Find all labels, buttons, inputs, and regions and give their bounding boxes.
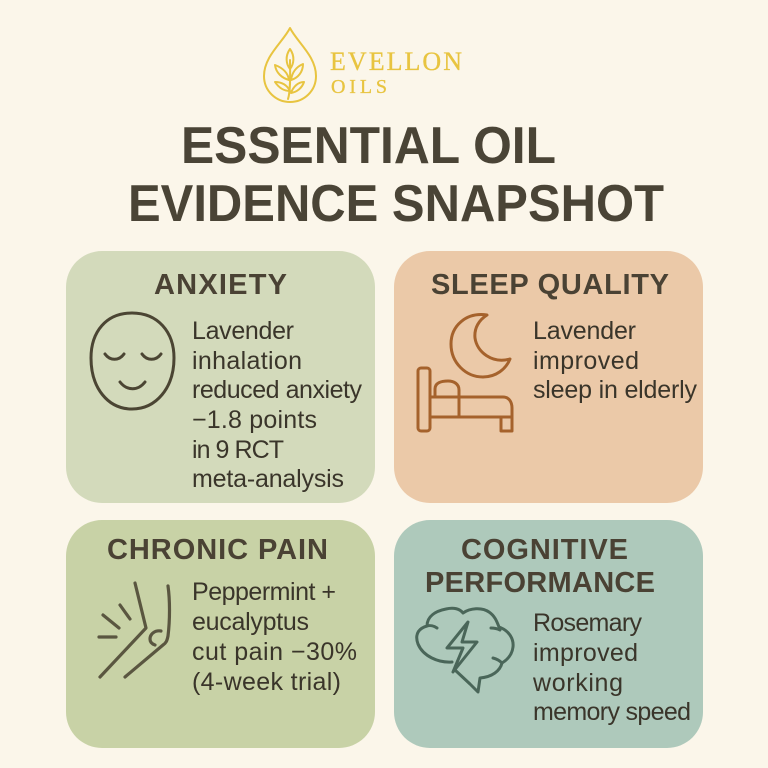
text: pain finding: cut pain −30% <box>192 638 357 666</box>
text: anxiety finding <box>192 317 362 493</box>
text: sleep finding: Lavender <box>533 317 636 345</box>
text: anxiety finding: −1.8 points <box>192 406 317 434</box>
text: sleep finding: sleep in elderly <box>533 376 698 404</box>
title: EVIDENCE SNAPSHOT <box>128 175 664 233</box>
brand name: EVELLON <box>330 47 462 76</box>
panel: anxiety <box>66 251 375 503</box>
icon: moon and bed <box>418 315 512 431</box>
icon: brain with lightning bolt <box>417 608 513 692</box>
text: sleep finding: improved <box>533 347 639 375</box>
text: anxiety finding: meta-analysis <box>192 465 344 493</box>
heading: cognitive performance: PERFORMANCE <box>425 567 655 599</box>
text: cognitive finding: improved <box>533 639 638 667</box>
text: anxiety finding: in 9 RCT <box>192 436 284 464</box>
heading: cognitive performance: COGNITIVE <box>461 534 628 566</box>
heading: anxiety: ANXIETY <box>154 269 287 301</box>
icon: oil drop with sprig <box>264 28 316 102</box>
text: anxiety finding: Lavender <box>192 317 294 345</box>
text: anxiety finding: reduced anxiety <box>192 376 362 404</box>
panel: sleep quality <box>394 251 703 503</box>
title: ESSENTIAL OIL <box>181 117 556 175</box>
text: cognitive finding: working <box>532 669 623 697</box>
text: cognitive finding: Rosemary <box>533 609 642 637</box>
heading: chronic pain: CHRONIC PAIN <box>107 534 328 566</box>
heading: sleep quality: SLEEP QUALITY <box>431 269 669 301</box>
text: pain finding: (4-week trial) <box>192 668 341 696</box>
text: cognitive finding: memory speed <box>533 698 691 726</box>
text: anxiety finding: inhalation <box>192 347 302 375</box>
title <box>128 117 664 233</box>
heading: cognitive performance <box>425 534 655 599</box>
icon: calm face <box>91 313 174 409</box>
brand descriptor: OILS <box>331 76 387 98</box>
icon: aching knee <box>99 583 170 677</box>
logo <box>264 28 462 102</box>
panel: chronic pain <box>66 520 375 748</box>
text: pain finding <box>192 578 357 696</box>
panel: cognitive performance <box>394 520 703 748</box>
text: pain finding: eucalyptus <box>192 608 309 636</box>
text: sleep finding <box>533 317 698 404</box>
text: cognitive finding <box>532 609 691 726</box>
text: pain finding: Peppermint + <box>192 578 336 606</box>
